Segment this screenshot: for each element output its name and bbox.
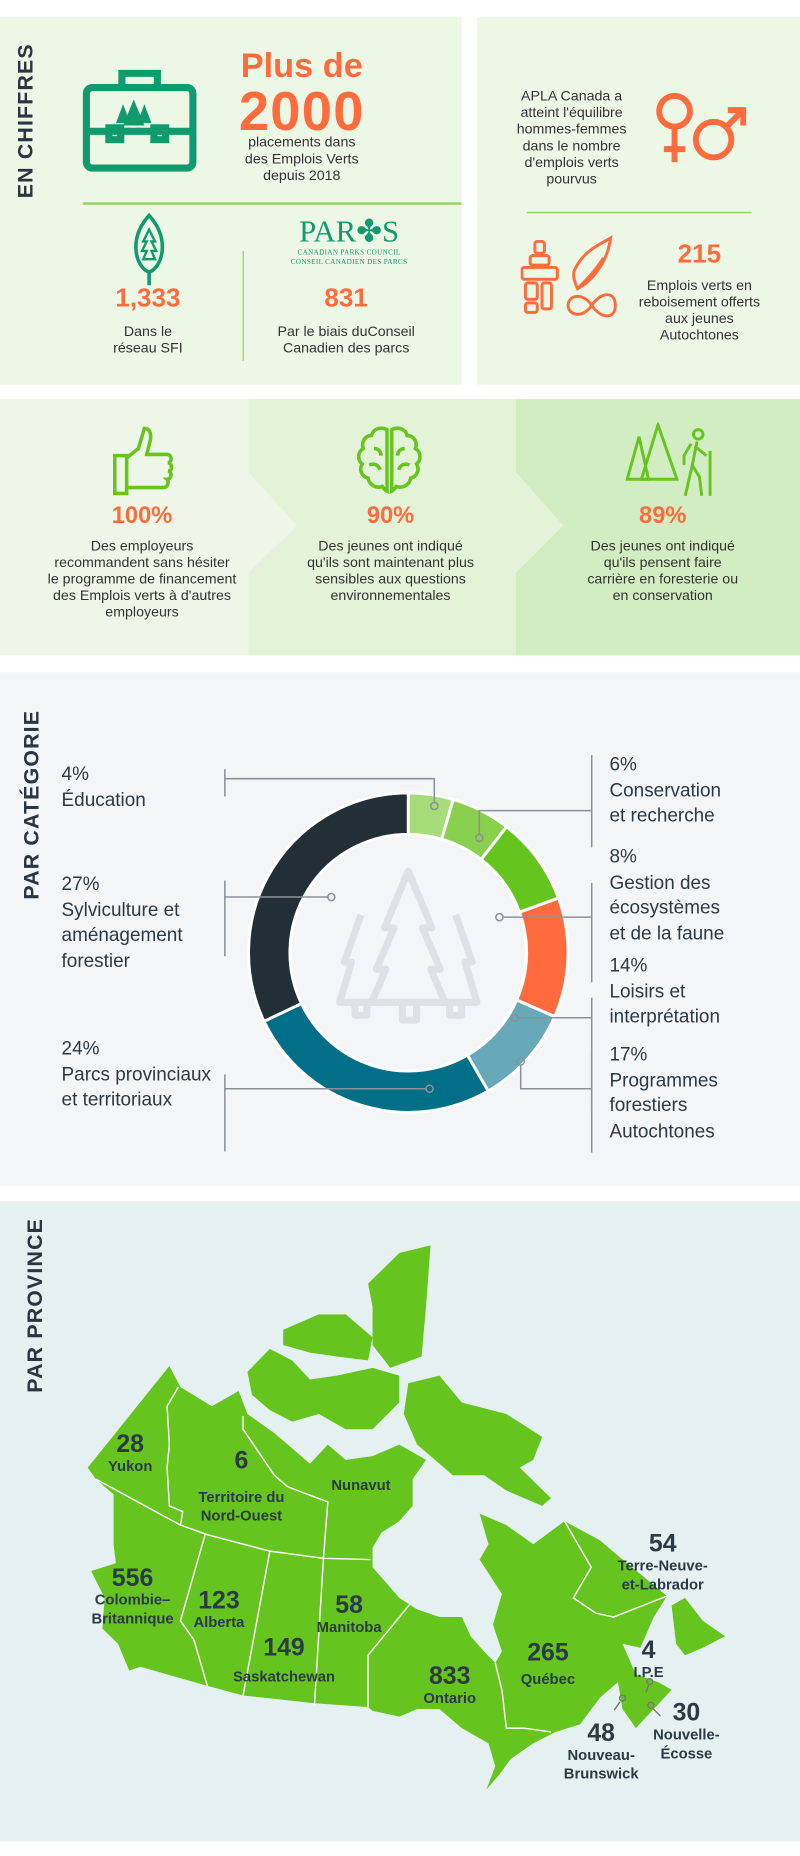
label: parcs provinciaux: 24% <box>62 1039 99 1059</box>
stat: 215: Emplois verts en <box>647 277 752 293</box>
label: conservation <box>609 755 721 826</box>
label: alberta: 123 <box>198 1587 240 1614</box>
stat: 831: Canadien des parcs <box>283 340 409 356</box>
label: loisirs: interprétation <box>609 1007 720 1027</box>
stat: 89%: qu'ils pensent faire <box>604 554 722 570</box>
label: saskatchewan <box>233 1634 335 1685</box>
panel: par province <box>0 1201 800 1841</box>
label: nouveau-brunswick: Brunswick <box>564 1766 639 1782</box>
label: loisirs: 14% <box>609 956 647 976</box>
label: parcs provinciaux: Parcs provinciaux <box>62 1064 211 1085</box>
stat: 89%: 89% <box>639 503 686 529</box>
text: APLA <box>517 88 626 187</box>
stat: 90%: Des jeunes ont indiqué <box>318 537 463 554</box>
label: manitoba: Manitoba <box>317 1619 382 1636</box>
stat: 100%: des Emplois verts à d'autres <box>53 587 231 604</box>
stat: 831: 831 <box>324 283 368 312</box>
text: APLA: APLA Canada a <box>521 88 622 104</box>
label: programmes autochtones: Programmes <box>609 1070 718 1091</box>
label: manitoba: 58 <box>335 1592 363 1619</box>
label: programmes autochtones: forestiers <box>609 1096 687 1116</box>
label: nouveau-brunswick: 48 <box>587 1720 615 1747</box>
stat: 1,333: 1,333 <box>115 283 181 312</box>
label: ipe: I.P.E <box>633 1664 664 1680</box>
label: education <box>62 764 146 810</box>
text: placements <box>245 134 359 183</box>
label: terre-neuve <box>618 1530 708 1593</box>
stat: 215 <box>639 239 760 343</box>
label: conservation: et recherche <box>609 806 715 826</box>
label: loisirs <box>609 956 720 1027</box>
label: nwt: 6 <box>234 1447 248 1475</box>
label: bc: Britannique <box>91 1611 174 1627</box>
text: placements: des Emplois Verts <box>245 150 359 167</box>
label: conservation: Conservation <box>609 780 721 801</box>
stat: 100% <box>48 503 236 620</box>
text: APLA: atteint l'équilibre <box>521 104 623 121</box>
stat: 90% <box>307 503 474 604</box>
stat: 215: 215 <box>678 239 721 269</box>
label: sylviculture: aménagement <box>62 925 183 946</box>
icon: inukshuk feather infinity <box>520 235 617 318</box>
stat: 89%: carrière en foresterie ou <box>587 570 738 587</box>
label: gestion: et de la faune <box>609 924 724 944</box>
label: sylviculture <box>62 875 183 971</box>
label: yukon: Yukon <box>108 1458 152 1475</box>
stat: 90%: environnementales <box>331 587 451 604</box>
label: programmes autochtones <box>609 1045 718 1141</box>
label: ipe: 4 <box>642 1637 655 1664</box>
panel: survey results <box>0 399 800 656</box>
logo: parcs <box>291 214 407 266</box>
label: quebec <box>521 1639 575 1688</box>
label: alberta <box>193 1587 244 1631</box>
stat: 89% <box>587 503 738 604</box>
stat: 831: Par le biais duConseil <box>277 323 415 340</box>
label: nouveau-brunswick: Nouveau- <box>567 1747 635 1763</box>
label: alberta: Alberta <box>193 1614 244 1631</box>
stat: plus de 2000: Plus de <box>241 47 363 85</box>
label: bc <box>91 1564 174 1627</box>
heading: en chiffres: EN CHIFFRES <box>14 43 37 198</box>
label: gestion: 8% <box>609 847 637 867</box>
label: nwt: Nord-Ouest <box>201 1508 282 1524</box>
label: conservation: 6% <box>609 755 637 775</box>
stat: 1,333: Dans le <box>124 323 172 340</box>
logo: parcs: CONSEIL CANADIEN DES PARCS <box>291 259 407 266</box>
label: terre-neuve: Terre-Neuve- <box>618 1557 708 1574</box>
stat: 100%: recommandent sans hésiter <box>54 554 230 570</box>
icon: thumbs up <box>113 426 174 496</box>
panel: par categorie <box>0 672 800 1186</box>
label: bc: Colombie– <box>95 1592 170 1608</box>
label: nouvelle-ecosse: Écosse <box>660 1746 712 1762</box>
panel: right stats <box>477 17 800 385</box>
stat: 831 <box>277 283 415 356</box>
label: nwt <box>198 1447 284 1524</box>
stat: 100%: Des employeurs <box>91 537 193 554</box>
label: parcs provinciaux: et territoriaux <box>62 1090 172 1110</box>
label: saskatchewan: 149 <box>263 1634 305 1662</box>
stat: 90%: qu'ils sont maintenant plus <box>307 554 474 570</box>
label: yukon <box>108 1431 152 1475</box>
label: education: 4% <box>62 764 89 785</box>
icon: brain <box>356 426 422 494</box>
stat: 215: Autochtones <box>660 327 739 343</box>
donut chart <box>224 755 592 1153</box>
stat: 1,333: réseau SFI <box>113 340 183 356</box>
label: nouveau-brunswick <box>564 1720 639 1782</box>
label: gestion <box>609 847 724 944</box>
label: terre-neuve: et-Labrador <box>622 1576 704 1593</box>
label: nouvelle-ecosse: 30 <box>673 1699 700 1727</box>
label: nwt: Territoire du <box>198 1489 284 1505</box>
stat: 100%: le programme de financement <box>48 570 236 587</box>
label: saskatchewan: Saskatchewan <box>233 1669 335 1685</box>
stat: 100%: employeurs <box>105 604 179 620</box>
label: bc: 556 <box>112 1564 153 1592</box>
heading: par categorie: PAR CATÉGORIE <box>20 710 43 900</box>
label: programmes autochtones: 17% <box>609 1045 647 1065</box>
icon: leaf <box>134 213 164 286</box>
stat: 90%: 90% <box>367 503 414 529</box>
stat: 215: reboisement offerts <box>639 293 760 310</box>
label: sylviculture: Sylviculture et <box>62 900 179 920</box>
label: sylviculture: 27% <box>62 875 99 895</box>
label: gestion: écosystèmes <box>609 898 720 918</box>
text: APLA: d'emplois verts <box>524 154 619 170</box>
label: quebec: 265 <box>527 1639 569 1666</box>
label: ontario: 833 <box>429 1663 470 1690</box>
label: programmes autochtones: Autochtones <box>609 1121 715 1141</box>
label: nunavut: Nunavut <box>331 1477 391 1493</box>
stat: plus de 2000 <box>239 47 365 142</box>
label: education: Éducation <box>62 790 146 810</box>
panel: en chiffres <box>0 17 462 385</box>
label: parcs provinciaux <box>62 1039 211 1110</box>
label: ontario <box>423 1663 476 1707</box>
label: sylviculture: forestier <box>62 951 130 971</box>
stat: 215: aux jeunes <box>665 310 734 327</box>
stat: plus de 2000: 2000 <box>239 80 365 142</box>
label: ipe <box>633 1637 664 1680</box>
stat: 89%: en conservation <box>613 587 713 604</box>
label: manitoba <box>317 1592 382 1636</box>
stat: 1,333 <box>113 283 183 356</box>
icon: briefcase <box>82 70 196 172</box>
label: yukon: 28 <box>116 1431 144 1458</box>
label: loisirs: Loisirs et <box>609 982 685 1002</box>
text: APLA: pourvus <box>546 170 597 187</box>
logo: parcs: CANADIAN PARKS COUNCIL <box>298 250 401 257</box>
text: APLA: hommes-femmes <box>517 121 626 137</box>
label: quebec: Québec <box>521 1671 575 1688</box>
text: placements: placements dans <box>248 134 355 150</box>
text: APLA: dans le nombre <box>523 137 621 154</box>
stat: 90%: sensibles aux questions <box>315 570 466 587</box>
text: placements: depuis 2018 <box>263 167 340 183</box>
heading: par province: PAR PROVINCE <box>23 1218 47 1393</box>
label: gestion: Gestion des <box>609 873 711 893</box>
label: nouvelle-ecosse <box>653 1699 720 1762</box>
logo: parcs: PAR✤S <box>299 214 399 249</box>
icon: trees in donut <box>340 871 477 1020</box>
label: terre-neuve: 54 <box>649 1530 677 1557</box>
label: ontario: Ontario <box>423 1690 476 1707</box>
icon: trees and hiker <box>625 422 712 496</box>
stat: 89%: Des jeunes ont indiqué <box>590 537 735 554</box>
label: nouvelle-ecosse: Nouvelle- <box>653 1727 720 1743</box>
icon: gender symbols <box>656 92 746 162</box>
stat: 100%: 100% <box>112 503 172 529</box>
